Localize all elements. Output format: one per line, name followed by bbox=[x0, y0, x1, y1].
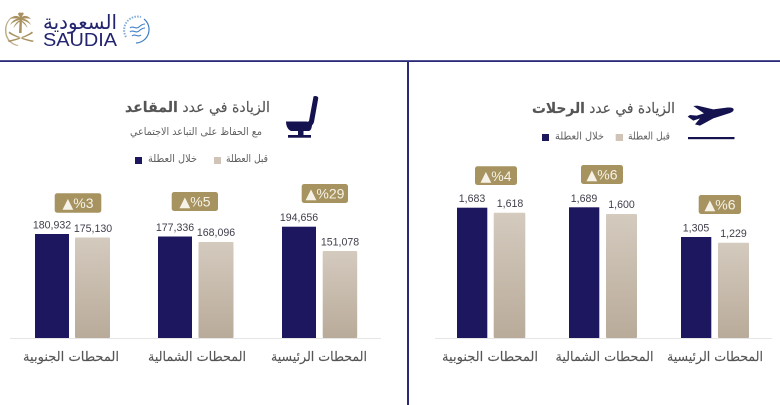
logo arabic wordmark: السعودية bbox=[43, 10, 117, 34]
category label: المحطات الجنوبية bbox=[442, 350, 538, 365]
bar before 1,229 bbox=[718, 228, 749, 338]
bar before 168,096 bbox=[197, 227, 235, 338]
bar during 180,932 bbox=[33, 220, 71, 338]
legend: flights bbox=[542, 130, 670, 142]
bar before 175,130 bbox=[74, 223, 112, 338]
bar during 177,336: 177,336 bbox=[156, 222, 194, 234]
bar before 168,096: 168,096 bbox=[197, 227, 235, 239]
icon: SkyTeam roundel bbox=[124, 17, 149, 43]
badge +3% bbox=[55, 193, 101, 213]
chart baseline bbox=[10, 338, 381, 339]
bar before 1,600 bbox=[606, 199, 637, 338]
logo: Saudia and SkyTeam bbox=[5, 10, 149, 50]
badge +5% bbox=[172, 192, 218, 211]
legend swatch: before holiday bbox=[214, 157, 221, 164]
heading: seats: الزيادة في عدد المقاعد bbox=[125, 100, 270, 116]
bar during 194,656: 194,656 bbox=[280, 212, 318, 224]
header rule bbox=[0, 60, 780, 62]
bar during 1,683: 1,683 bbox=[459, 193, 485, 205]
bar during 1,305: 1,305 bbox=[683, 222, 709, 234]
bar during 1,305 bbox=[681, 222, 711, 338]
bar during 177,336 bbox=[156, 222, 194, 338]
panel divider bbox=[407, 61, 409, 405]
badge +5%: ▲%5 bbox=[179, 194, 211, 210]
group: northern stations flights bbox=[556, 165, 654, 365]
group: main stations flights bbox=[667, 195, 763, 365]
icon: palm and swords emblem bbox=[5, 13, 34, 46]
bar before 1,618 bbox=[494, 198, 525, 338]
badge +6%: ▲%6 bbox=[704, 196, 736, 214]
bar before 1,618: 1,618 bbox=[497, 198, 523, 210]
bar during 1,689: 1,689 bbox=[571, 193, 597, 205]
category label: المحطات الشمالية bbox=[148, 350, 246, 365]
icon: airplane seat bbox=[286, 96, 318, 138]
logo latin wordmark: SAUDIA bbox=[43, 30, 117, 50]
legend swatch: during holiday bbox=[542, 134, 549, 141]
badge +29%: ▲%29 bbox=[306, 186, 345, 202]
category label: المحطات الشمالية bbox=[556, 350, 654, 365]
icon: departing airplane bbox=[688, 106, 734, 139]
bar before 175,130: 175,130 bbox=[74, 223, 112, 235]
panel: seats increase bbox=[10, 96, 381, 365]
category label: المحطات الجنوبية bbox=[23, 350, 119, 365]
legend: seats bbox=[135, 153, 268, 165]
category label: المحطات الرئيسية bbox=[271, 350, 367, 365]
heading: flights: الزيادة في عدد الرحلات bbox=[532, 101, 675, 117]
group: southern stations seats bbox=[23, 193, 119, 365]
bar before 151,078 bbox=[321, 236, 359, 338]
chart baseline bbox=[435, 338, 772, 339]
bar during 1,689 bbox=[569, 193, 599, 338]
panel: flights increase bbox=[435, 101, 772, 365]
bar during 1,683 bbox=[457, 193, 487, 338]
legend label: during holiday: خلال العطلة bbox=[148, 153, 197, 165]
badge +4% bbox=[475, 166, 517, 185]
legend label: before holiday: قبل العطلة bbox=[628, 130, 670, 142]
legend label: during holiday: خلال العطلة bbox=[555, 130, 604, 142]
badge +6%: ▲%6 bbox=[586, 166, 618, 184]
subheading: social distancing: مع الحفاظ على التباعد الاجتماعي bbox=[130, 126, 262, 138]
group: northern stations seats bbox=[148, 192, 246, 365]
bar before 1,600: 1,600 bbox=[608, 199, 635, 211]
bar before 151,078: 151,078 bbox=[321, 236, 359, 248]
legend label: before holiday: قبل العطلة bbox=[226, 153, 268, 165]
badge +6% bbox=[699, 195, 741, 214]
bar during 194,656 bbox=[280, 212, 318, 338]
group: main stations seats bbox=[271, 184, 367, 365]
badge +6% bbox=[581, 165, 623, 184]
legend swatch: before holiday bbox=[616, 134, 623, 141]
group: southern stations flights bbox=[442, 166, 538, 365]
badge +3%: ▲%3 bbox=[62, 195, 94, 212]
legend swatch: during holiday bbox=[135, 157, 142, 164]
bar before 1,229: 1,229 bbox=[720, 228, 747, 240]
badge +4%: ▲%4 bbox=[480, 168, 512, 185]
bar during 180,932: 180,932 bbox=[33, 220, 71, 232]
category label: المحطات الرئيسية bbox=[667, 350, 763, 365]
